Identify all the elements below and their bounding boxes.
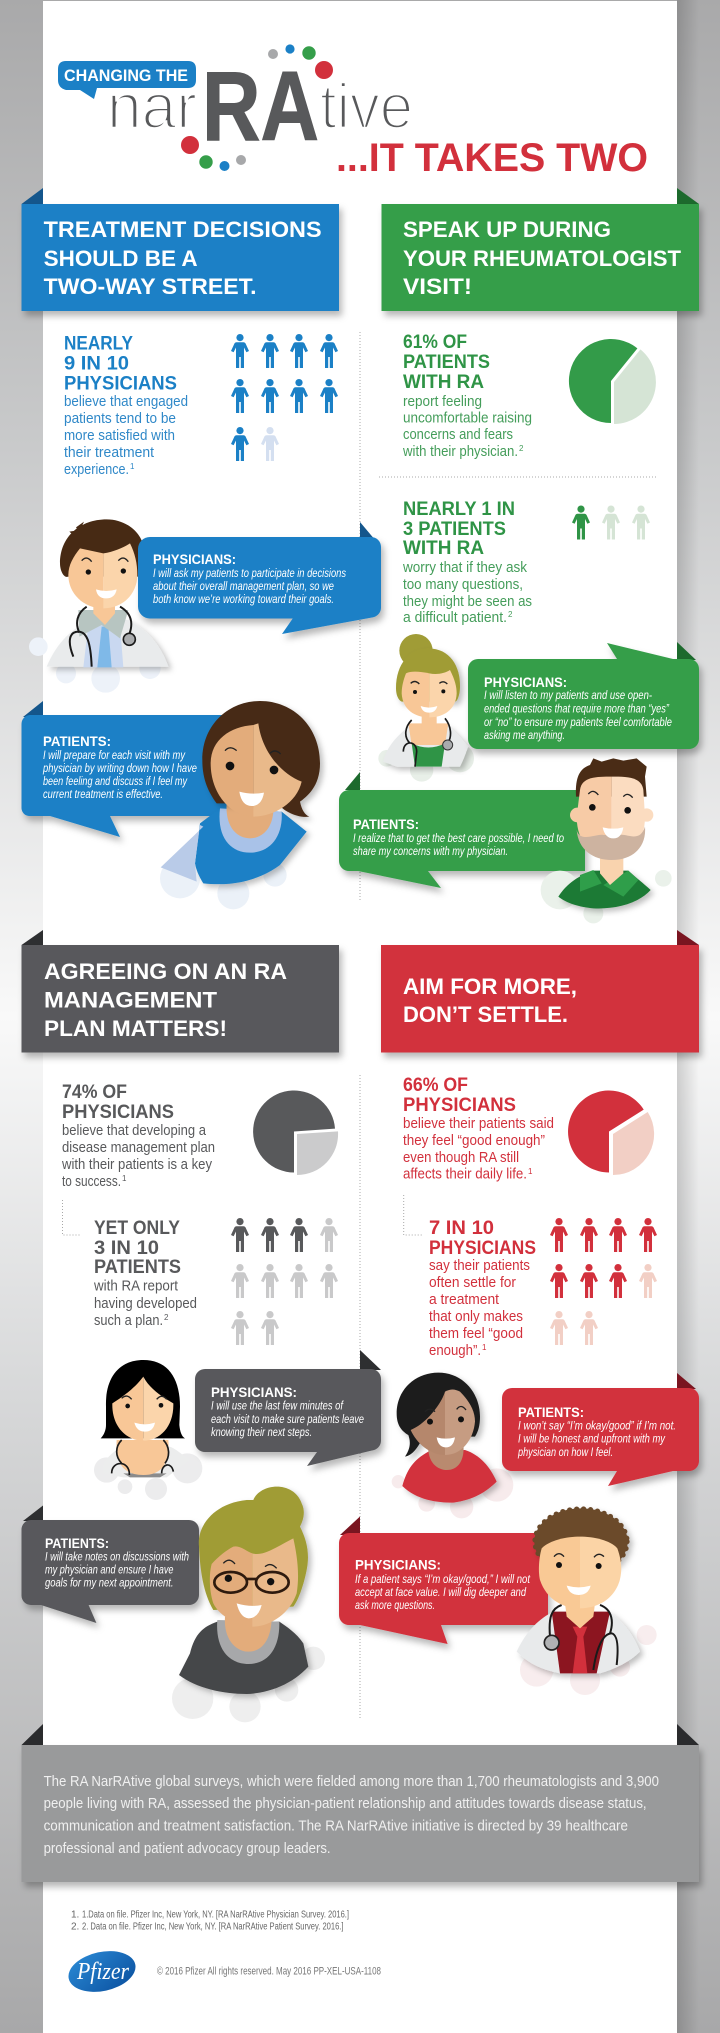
stat: 74% of physicians: PHYSICIANS: [62, 1101, 174, 1123]
callout: patients green: [339, 772, 585, 888]
stat: yet only 3 in 10 patients: having developed: [94, 1295, 197, 1312]
stat: yet only 3 in 10 patients: such a plan.: [94, 1312, 163, 1329]
stat: nearly 9 in 10 physicians: 1: [130, 462, 135, 471]
icon array: 1 of 3 people: [572, 506, 650, 540]
logotype text: tive: [320, 72, 413, 142]
callout: physicians gray: PHYSICIANS:: [211, 1384, 297, 1400]
stat: nearly 1 in 3 patients: a difficult patient.: [403, 609, 507, 626]
callout: physicians blue: [138, 522, 381, 634]
stat: 61% of patients: 61% OF: [403, 331, 467, 353]
stat: nearly 9 in 10 physicians: PHYSICIANS: [64, 372, 177, 394]
panel heading: speak up: SPEAK UP DURING: [403, 217, 611, 242]
callout: patients blue: been feeling and discuss if I feel my: [43, 774, 188, 788]
character: male physician red: [517, 1508, 657, 1695]
stat: 66% of physicians: 1: [528, 1167, 533, 1176]
callout: physicians blue: both know we’re working toward their goals.: [153, 592, 334, 606]
references: 1.Data on file. Pfizer Inc, New York, NY. [RA NarRAtive Physician Survey. 2016.]: [82, 1910, 349, 1920]
character: female patient gray with glasses: [172, 1487, 325, 1722]
icon array: 9 of 10 people: [231, 334, 338, 461]
panel heading: speak up: [382, 188, 699, 311]
callout: patients green: share my concerns with my physician.: [353, 844, 508, 858]
stat: 61% of patients: report feeling: [403, 393, 482, 410]
stat: yet only 3 in 10 patients: 2: [164, 1313, 169, 1322]
stat: 74% of physicians: with their patients is a key: [61, 1156, 212, 1173]
callout: patients gray: [21, 1506, 199, 1623]
references: 2.: [71, 1922, 79, 1932]
stat: 66% of physicians: [403, 1074, 554, 1182]
stat: nearly 9 in 10 physicians: patients tend to be: [64, 410, 176, 427]
stat: 61% of patients: uncomfortable raising: [403, 410, 532, 426]
panel heading: speak up: VISIT!: [403, 274, 472, 299]
pie chart: 74 percent: [253, 1090, 338, 1175]
callout: physicians red: accept at face value. I will dig deeper and: [355, 1585, 526, 1599]
panel heading: agreeing on a plan: MANAGEMENT: [44, 988, 218, 1012]
callout: physicians green: ended questions that require more than “yes”: [484, 702, 670, 716]
stat: nearly 9 in 10 physicians: believe that engaged: [64, 393, 188, 410]
callout: patients blue: PATIENTS:: [43, 733, 111, 749]
character: male physician blue: [29, 519, 168, 693]
pie chart: 61 percent: [569, 339, 656, 424]
character: female patient blue: [160, 701, 320, 909]
stat: nearly 9 in 10 physicians: more satisfied with: [64, 427, 175, 444]
stat: nearly 9 in 10 physicians: their treatment: [64, 444, 155, 461]
icon array: 3 of 10 people: [231, 1218, 338, 1345]
callout: physicians green: PHYSICIANS:: [484, 674, 567, 690]
callout: physicians red: If a patient says “I’m okay/good,” I will not: [355, 1572, 531, 1586]
stat: 7 in 10 physicians: [429, 1217, 536, 1359]
panel heading: agreeing on a plan: AGREEING ON AN RA: [44, 959, 287, 984]
logotype text: RA: [202, 51, 319, 161]
stat: 66% of physicians: affects their daily life.: [403, 1166, 527, 1182]
stat: yet only 3 in 10 patients: PATIENTS: [94, 1256, 181, 1278]
stat: nearly 9 in 10 physicians: experience.: [64, 461, 129, 478]
stat: 7 in 10 physicians: PHYSICIANS: [429, 1237, 536, 1259]
panel heading: aim for more: DON’T SETTLE.: [403, 1002, 568, 1027]
stat: nearly 9 in 10 physicians: NEARLY: [64, 332, 133, 354]
callout: patients gray: I will take notes on discussions with: [45, 1550, 189, 1564]
stat: 61% of patients: with their physician.: [402, 443, 518, 460]
stat: nearly 9 in 10 physicians: 9 IN 10: [64, 352, 129, 374]
stat: yet only 3 in 10 patients: YET ONLY: [94, 1217, 180, 1239]
stat: nearly 1 in 3 patients: 3 PATIENTS: [403, 518, 506, 540]
references: [71, 1910, 349, 1932]
references: 2. Data on file. Pfizer Inc, New York, NY. [RA NarRAtive Patient Survey. 2016.]: [82, 1922, 344, 1932]
stat: 7 in 10 physicians: often settle for: [429, 1274, 516, 1291]
panel heading: aim for more: [381, 930, 699, 1052]
stat: nearly 1 in 3 patients: too many questions,: [403, 576, 523, 593]
callout: patients blue: I will prepare for each visit with my: [43, 748, 186, 762]
callout: physicians green: I will listen to my patients and use open-: [484, 688, 652, 702]
character: male patient green: [541, 758, 672, 923]
stat: yet only 3 in 10 patients: with RA report: [93, 1278, 179, 1294]
panel: survey description: [22, 1724, 699, 1882]
stat: yet only 3 in 10 patients: [93, 1217, 197, 1329]
callout: physicians blue: PHYSICIANS:: [153, 551, 236, 567]
stat: 61% of patients: WITH RA: [403, 371, 484, 393]
panel heading: treatment decisions: TWO-WAY STREET.: [44, 274, 257, 299]
callout: physicians gray: knowing their next steps.: [211, 1425, 312, 1439]
logo: pfizer: [65, 1945, 139, 1998]
stat: nearly 1 in 3 patients: NEARLY 1 IN: [403, 498, 515, 520]
panel heading: agreeing on a plan: [22, 930, 339, 1052]
callout: patients red: PATIENTS:: [518, 1404, 584, 1420]
callout: physicians red: ask more questions.: [355, 1598, 435, 1612]
callout: patients gray: PATIENTS:: [45, 1535, 109, 1551]
panel heading: treatment decisions: [22, 188, 339, 311]
stat: 7 in 10 physicians: them feel “good: [429, 1325, 523, 1342]
callout: patients blue: physician by writing down how I have: [42, 761, 197, 775]
callout: physicians green: asking me anything.: [484, 728, 565, 742]
stat: 74% of physicians: disease management plan: [62, 1139, 215, 1156]
stat: 74% of physicians: 1: [122, 1174, 127, 1183]
callout: physicians gray: I will use the last few minutes of: [211, 1398, 344, 1412]
stat: nearly 9 in 10 physicians: [64, 332, 188, 478]
callout: patients blue: current treatment is effective.: [43, 787, 163, 801]
callout: patients red: I will be honest and upfront with my: [518, 1432, 666, 1446]
panel: survey description: professional and patient advocacy group leaders.: [44, 1840, 331, 1857]
stat: 74% of physicians: believe that developing a: [62, 1122, 207, 1139]
character: female patient red: [392, 1373, 513, 1518]
stat: 66% of physicians: even though RA still: [403, 1149, 519, 1166]
stat: 66% of physicians: they feel “good enough”: [403, 1132, 545, 1149]
callout: patients green: I realize that to get the best care possible, I need to: [353, 831, 564, 845]
stat: 61% of patients: concerns and fears: [403, 426, 513, 443]
stat: nearly 1 in 3 patients: worry that if they ask: [402, 559, 527, 576]
stat: yet only 3 in 10 patients: 3 IN 10: [94, 1237, 159, 1259]
speech bubble: changing the: CHANGING THE: [64, 66, 188, 85]
copyright: © 2016 Pfizer All rights reserved. May 2016 PP-XEL-USA-1108: [157, 1966, 381, 1978]
stat: 61% of patients: [402, 331, 532, 460]
stat: 7 in 10 physicians: 1: [482, 1343, 487, 1352]
stat: 74% of physicians: [61, 1081, 215, 1190]
character: female physician green: [378, 634, 474, 782]
stat: 7 in 10 physicians: a treatment: [429, 1291, 500, 1308]
panel: survey description: communication and treatment satisfaction. The RA NarRAtive initiative is directed by 39 healthcare: [44, 1818, 628, 1834]
stat: 7 in 10 physicians: say their patients: [429, 1257, 530, 1274]
stat: nearly 1 in 3 patients: they might be seen as: [403, 593, 532, 610]
callout: patients red: [502, 1373, 699, 1486]
callout: physicians blue: about their overall management plan, so we: [153, 579, 334, 593]
icon array: 7 of 10 people: [550, 1218, 657, 1345]
stat: nearly 1 in 3 patients: WITH RA: [403, 537, 484, 559]
stat: 66% of physicians: believe their patients said: [403, 1115, 554, 1132]
stat: 74% of physicians: 74% OF: [62, 1081, 127, 1103]
panel: survey description: people living with RA, assessed the physician-patient relationship and attitudes towards disease status,: [44, 1795, 647, 1812]
callout: physicians red: PHYSICIANS:: [355, 1556, 441, 1572]
speech bubble: changing the: [58, 61, 196, 99]
vertical dotted divider lower: [359, 1075, 361, 1719]
logotype text: nar: [107, 72, 197, 142]
callout: physicians red: [339, 1516, 548, 1644]
callout: physicians blue: I will ask my patients to participate in decisions: [153, 566, 346, 580]
callout: physicians gray: [195, 1350, 381, 1466]
references: 1.: [71, 1910, 79, 1920]
callout: physicians gray: each visit to make sure patients leave: [211, 1412, 364, 1426]
panel heading: treatment decisions: TREATMENT DECISIONS: [44, 217, 322, 242]
callout: patients gray: my physician and ensure I have: [45, 1562, 174, 1576]
stat: nearly 1 in 3 patients: 2: [508, 610, 513, 619]
stat: 61% of patients: PATIENTS: [403, 351, 490, 373]
callout: physicians green: or “no” to ensure my patients feel comfortable: [484, 715, 672, 729]
logotype text: [107, 51, 413, 161]
callout: physicians green: [468, 642, 699, 749]
stat: nearly 1 in 3 patients: [402, 498, 532, 626]
callout: patients blue: [21, 701, 240, 837]
callout: patients green: PATIENTS:: [353, 816, 419, 832]
stat: 74% of physicians: to success.: [62, 1173, 121, 1190]
character: female physician gray: [94, 1360, 202, 1500]
panel heading: agreeing on a plan: PLAN MATTERS!: [44, 1016, 227, 1041]
coloured dots: [181, 44, 333, 171]
panel heading: speak up: YOUR RHEUMATOLOGIST: [403, 246, 682, 271]
callout: patients red: physician on how I feel.: [517, 1445, 613, 1459]
logo: changing the narRAtive: [58, 44, 413, 171]
stat: 66% of physicians: PHYSICIANS: [403, 1094, 516, 1116]
logo: pfizer: Pfizer: [76, 1959, 130, 1985]
stat: 61% of patients: 2: [519, 444, 524, 453]
tagline: it takes two: ...IT TAKES TWO: [336, 136, 648, 180]
stat: 7 in 10 physicians: that only makes: [429, 1308, 523, 1325]
panel heading: treatment decisions: SHOULD BE A: [44, 246, 198, 271]
stat: 7 in 10 physicians: 7 IN 10: [429, 1217, 494, 1239]
vertical dotted divider upper: [359, 332, 361, 900]
callout: patients gray: goals for my next appointment.: [45, 1576, 174, 1590]
stat: 7 in 10 physicians: enough”.: [429, 1342, 481, 1359]
callout: patients red: I won’t say “I’m okay/good” if I’m not.: [518, 1418, 676, 1432]
stat: 66% of physicians: 66% OF: [403, 1074, 468, 1096]
panel heading: aim for more: AIM FOR MORE,: [403, 974, 577, 999]
pie chart: 66 percent: [568, 1090, 654, 1175]
